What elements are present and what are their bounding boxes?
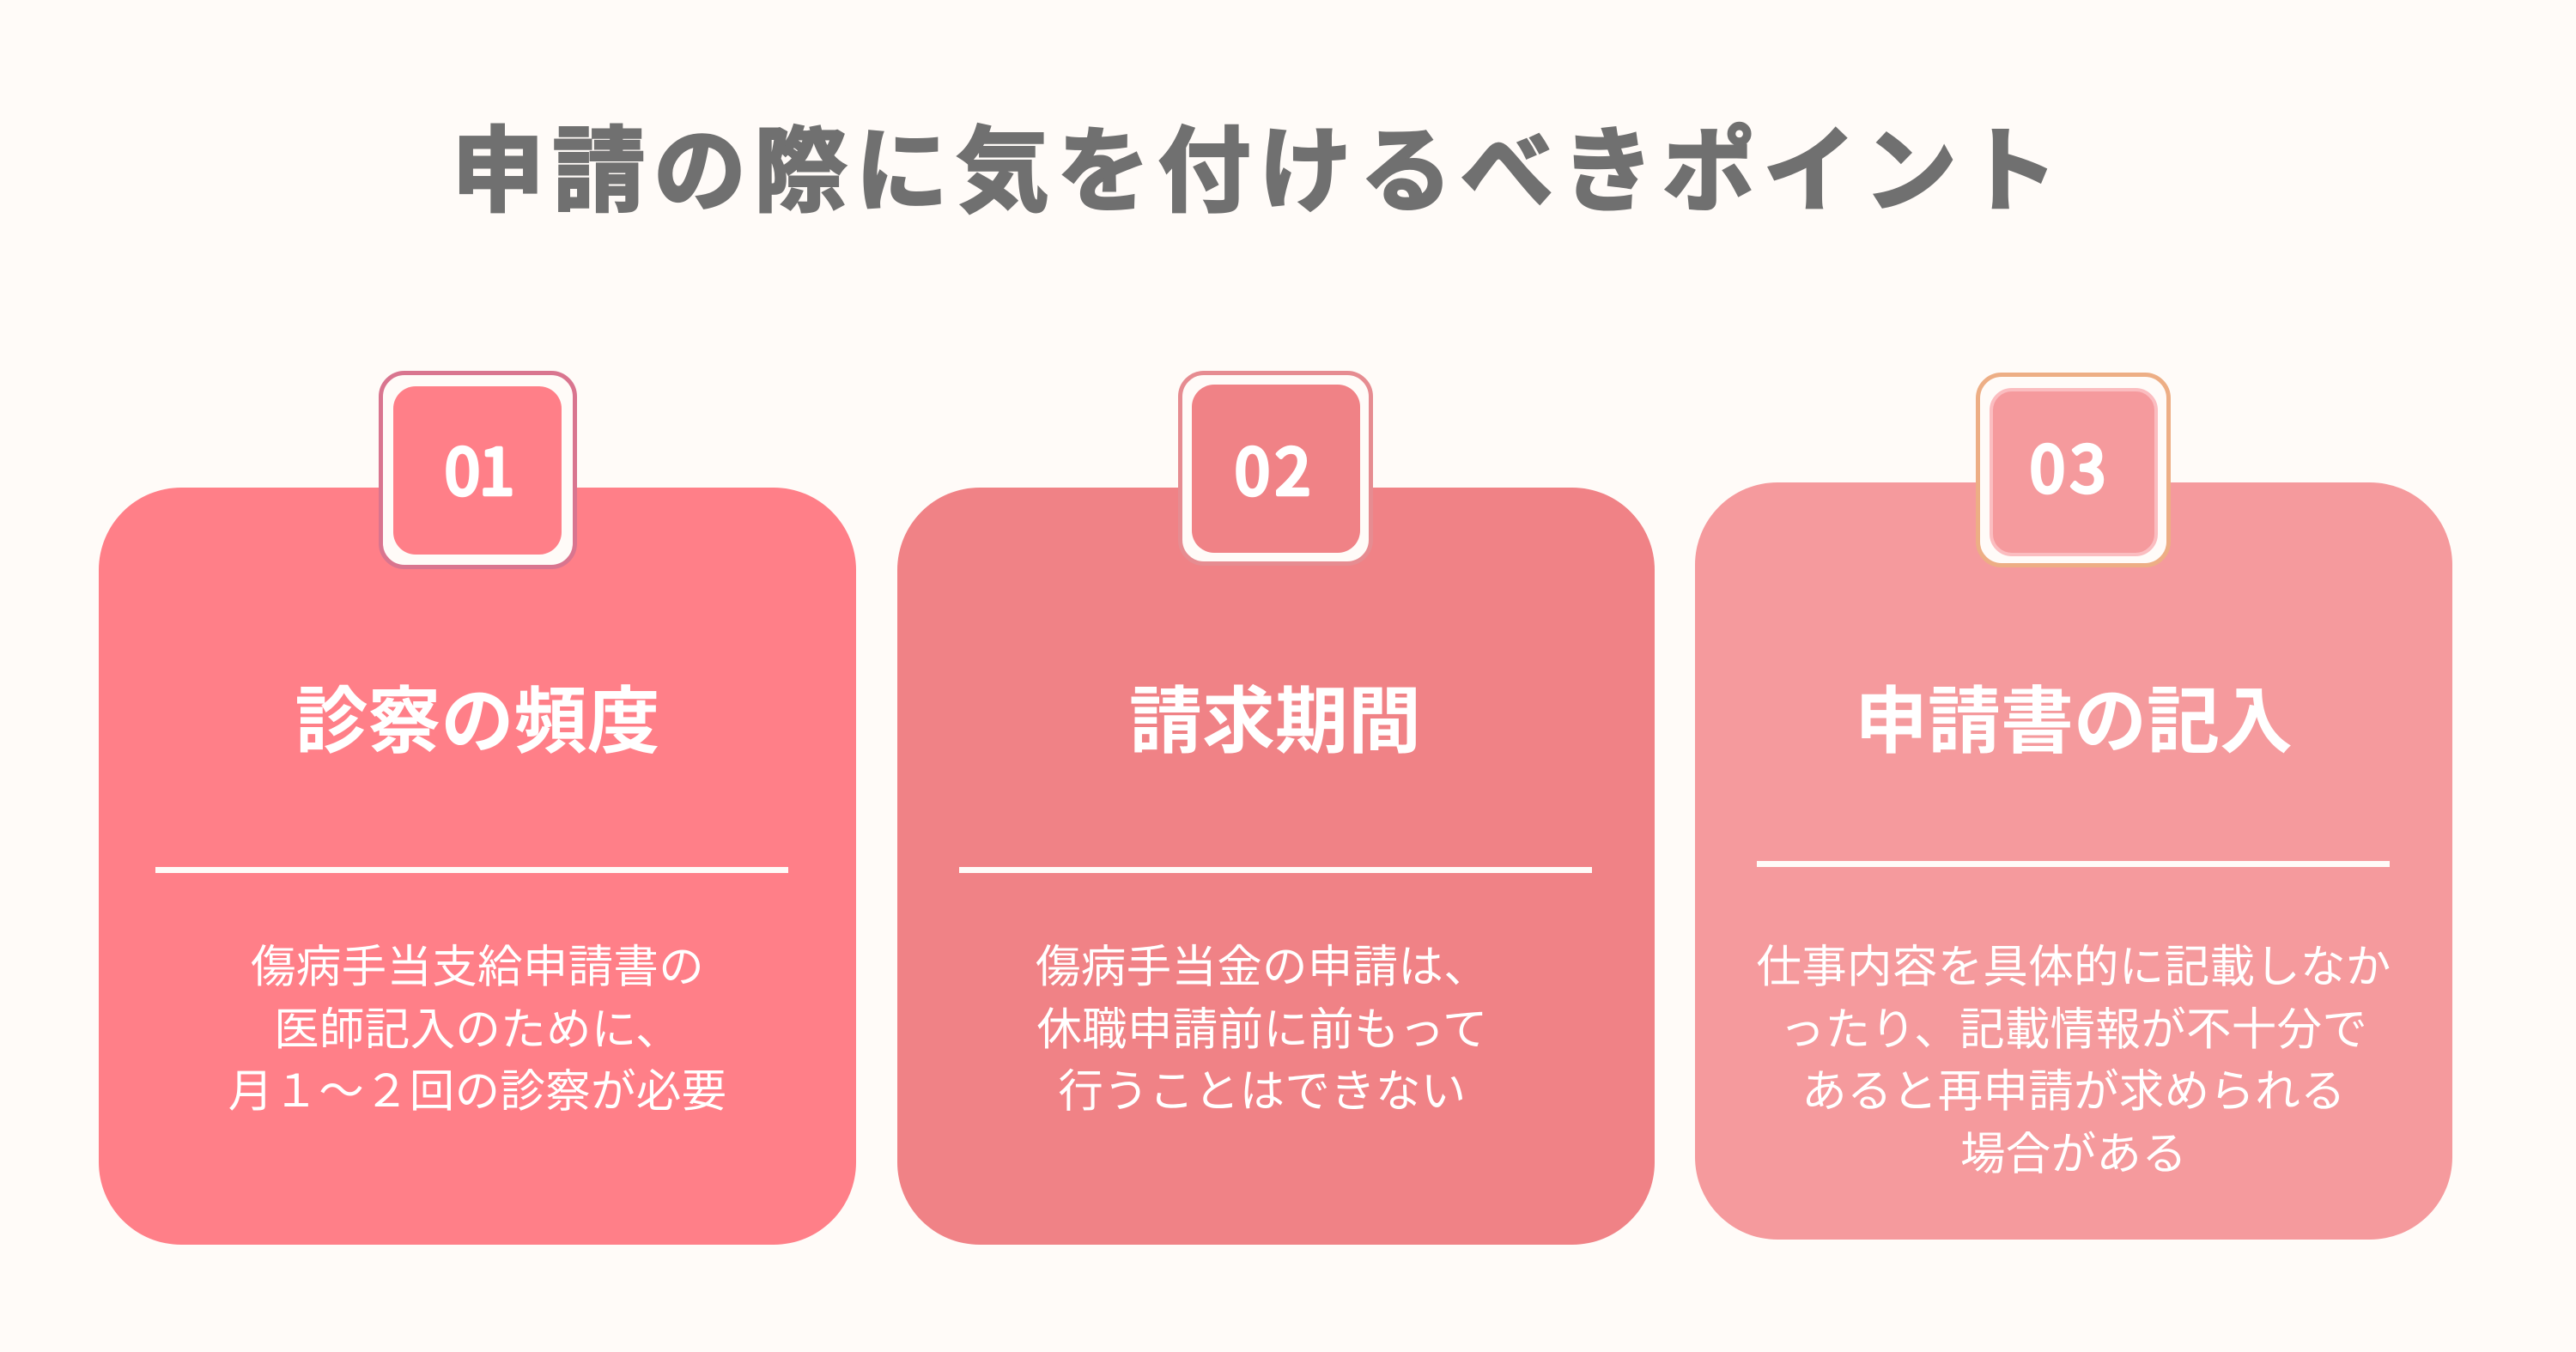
card 2 divider (959, 867, 1592, 873)
panel: card 3 background (1695, 482, 2452, 1240)
card 3 heading: 申請書の記入 (1855, 682, 2293, 763)
card 3 body text: あると再申請が求められる (1801, 1066, 2346, 1117)
card 1 divider (155, 867, 788, 873)
card 1 body text (228, 942, 726, 1117)
badge 03 (1976, 373, 2171, 567)
card 3 body text: 場合がある (1960, 1129, 2187, 1179)
badge 01 (379, 371, 577, 569)
card 3 divider (1757, 861, 2390, 867)
card 2 body text: 行うことはできない (1058, 1066, 1467, 1117)
card 1 body text: 月１～２回の診察が必要 (228, 1066, 726, 1117)
badge 03 inner square (1990, 388, 2158, 556)
card 3 body text: ったり、記載情報が不十分で (1780, 1004, 2367, 1055)
card 2 heading: 請求期間 (1129, 682, 1421, 763)
badge 03 number: 03 (2030, 419, 2111, 511)
card 1 body text: 医師記入のために、 (274, 1004, 681, 1055)
card 1 heading: 診察の頻度 (295, 682, 659, 763)
badge 02 number: 02 (1235, 421, 1315, 513)
badge 01 number: 01 (445, 421, 513, 513)
panel: card 2 background (897, 488, 1655, 1245)
card 3 body text (1756, 942, 2391, 1179)
card 1 body text: 傷病手当支給申請書の (251, 942, 704, 992)
card 2 body text: 傷病手当金の申請は、 (1036, 942, 1489, 992)
card 3 body text: 仕事内容を具体的に記載しなか (1756, 942, 2391, 992)
card 2 body text: 休職申請前に前もって (1036, 1004, 1488, 1055)
badge 02 inner square (1192, 385, 1360, 553)
title: 申請の際に気を付けるべきポイント (452, 119, 2066, 223)
card 2 body text (1036, 942, 1489, 1117)
badge 01 inner square (393, 386, 562, 555)
badge 02 (1178, 371, 1373, 566)
panel: card 1 background (99, 488, 856, 1245)
